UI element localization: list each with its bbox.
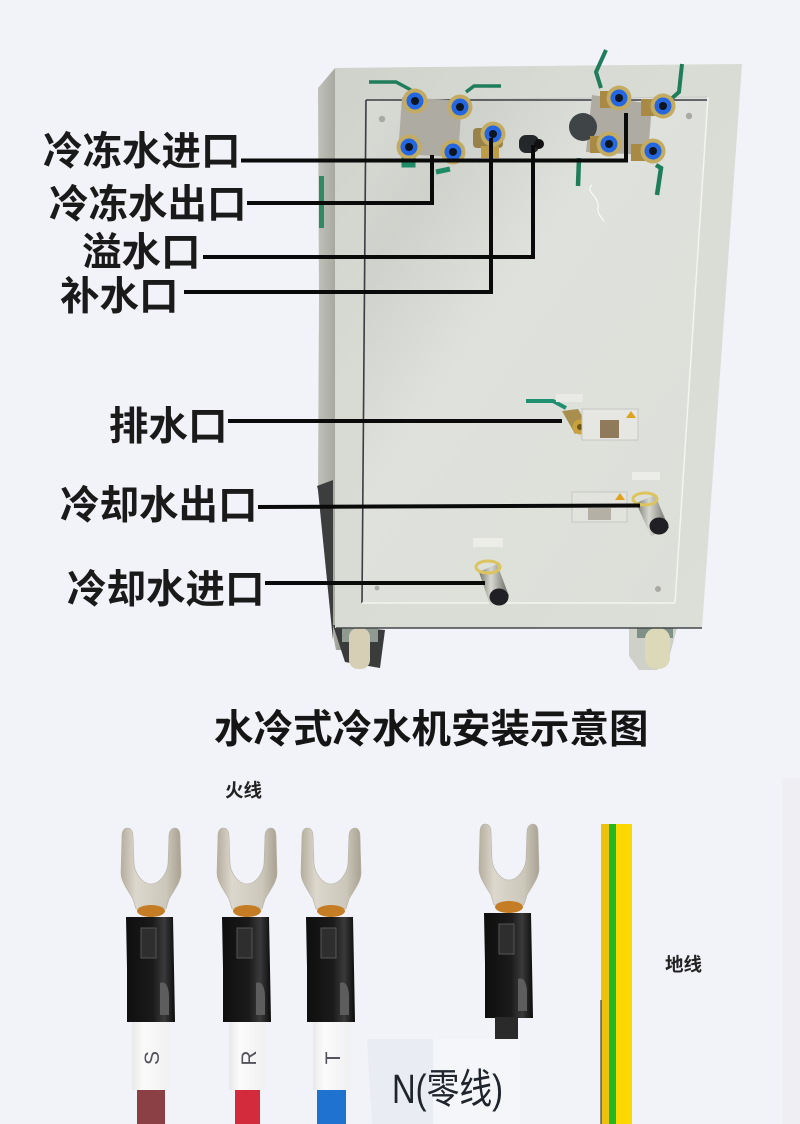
- right valve plate: [569, 50, 682, 221]
- label: drain: 排水口: [109, 405, 228, 449]
- leader line: 溢水口: [203, 145, 533, 257]
- chiller machine: [317, 50, 742, 670]
- label: cooling water outlet: 冷却水出口: [60, 484, 258, 528]
- warning label drain: [582, 409, 638, 440]
- N label sleeve: [367, 1039, 520, 1124]
- leader line: 补水口: [184, 138, 491, 292]
- leader line: 冷却水出口: [258, 506, 640, 507]
- label: chilled water inlet: 冷冻水进口: [43, 130, 240, 174]
- left valve plate: [369, 82, 501, 172]
- leader line: 排水口: [228, 419, 562, 423]
- title: 水冷式冷水机安装示意图: [214, 708, 648, 752]
- leader line: 冷却水进口: [265, 581, 485, 585]
- inner door panel: [362, 97, 708, 603]
- wire S terminal: S: [141, 1051, 164, 1065]
- wire R terminal: R: [238, 1050, 261, 1066]
- wire N terminal: [479, 824, 539, 1040]
- shadow beneath machine: [333, 625, 385, 668]
- warning label outlet: [572, 492, 627, 522]
- screws: [375, 113, 692, 592]
- front cabinet panel: [335, 64, 742, 628]
- ground wire yellow-green: [601, 824, 632, 1124]
- label: live wire: 火线: [225, 780, 262, 801]
- label: chilled water outlet: 冷冻水出口: [49, 183, 246, 227]
- wire R terminal: [217, 828, 277, 1124]
- overflow fitting: [519, 135, 544, 153]
- leader line: 冷冻水进口: [241, 113, 626, 160]
- make-up water fitting: [473, 122, 506, 158]
- left side panel: [318, 68, 345, 650]
- right caster: [629, 628, 677, 670]
- left caster: [342, 628, 378, 669]
- label: ground wire: 地线: [665, 954, 702, 975]
- label: make-up water: 补水口: [60, 275, 178, 319]
- leader line: 冷冻水出口: [247, 155, 432, 203]
- label: cooling water inlet: 冷却水进口: [67, 568, 264, 612]
- cooling water inlet pipe: [473, 538, 509, 606]
- wire T terminal: T: [322, 1051, 345, 1064]
- N label sleeve: N(零线): [392, 1065, 503, 1112]
- wire T terminal: [301, 828, 361, 1124]
- wire S terminal: [121, 828, 181, 1124]
- label: overflow: 溢水口: [82, 231, 200, 275]
- drain valve: [526, 394, 588, 434]
- cooling water outlet pipe: [632, 472, 669, 536]
